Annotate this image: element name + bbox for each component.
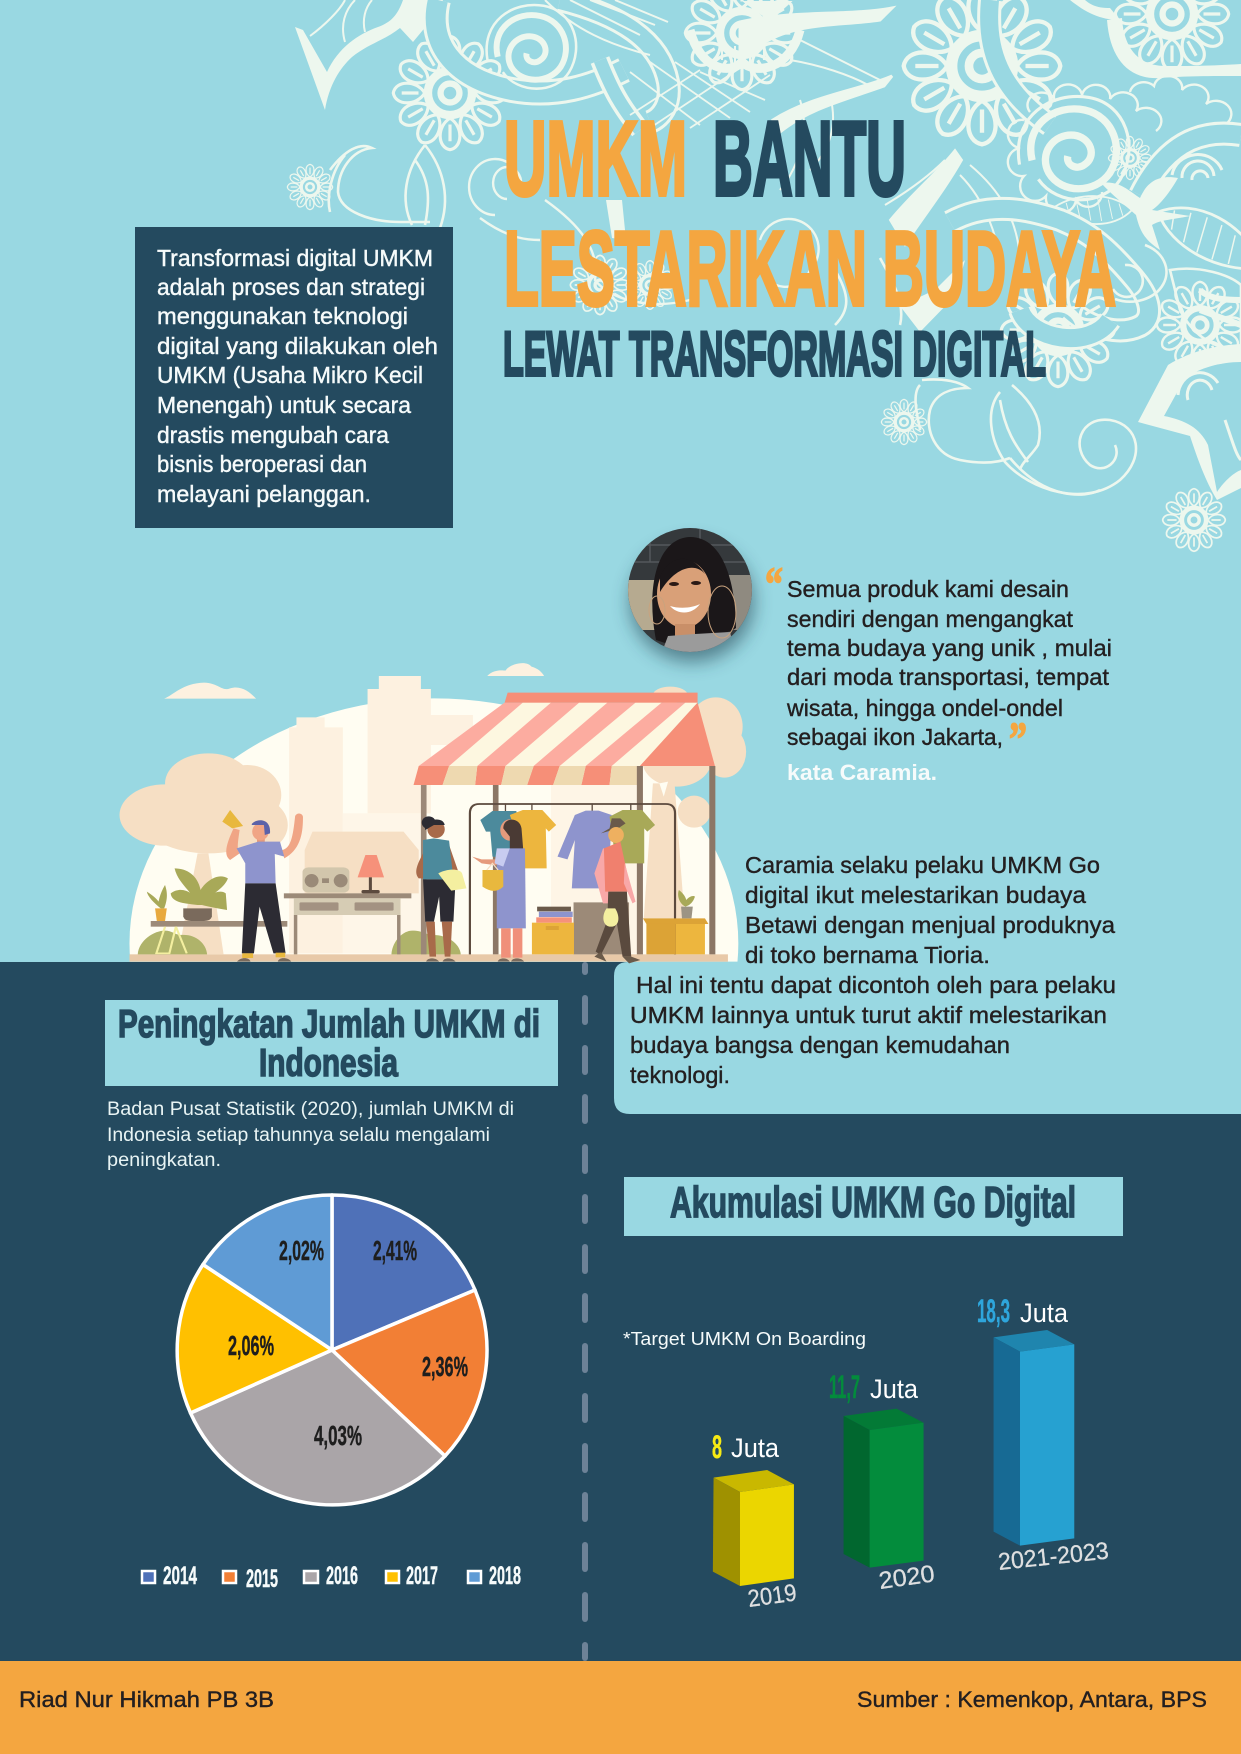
pie legend: 2017 xyxy=(406,1562,438,1590)
figure: woman with towel xyxy=(416,816,466,962)
story text: UMKM lainnya untuk turut aktif melestarikan xyxy=(630,1002,1107,1028)
pie labels xyxy=(228,1235,468,1451)
bar value labels: 8 xyxy=(712,1429,722,1465)
quote text xyxy=(765,558,1112,785)
pie legend: 2014 xyxy=(163,1562,197,1590)
pie labels: 4,03% xyxy=(314,1420,362,1451)
pie chart xyxy=(177,1195,487,1505)
bar value labels: 11,7 xyxy=(829,1369,860,1405)
story text: digital ikut melestarikan budaya xyxy=(745,882,1086,908)
figure: man with hat and shopping bag xyxy=(594,818,640,963)
icon: opening quote mark: “ xyxy=(765,558,783,611)
story text: Caramia selaku pelaku UMKM Go xyxy=(745,852,1100,878)
pie legend: 2015 xyxy=(246,1565,278,1593)
story text: di toko bernama Tioria. xyxy=(745,942,990,968)
table with radio and lamp xyxy=(284,855,411,954)
footer: Sumber : Kemenkop, Antara, BPS xyxy=(857,1687,1207,1712)
definition text: UMKM (Usaha Mikro Kecil xyxy=(157,362,423,388)
title: BANTU xyxy=(713,100,906,218)
pie labels: 2,02% xyxy=(279,1235,324,1266)
definition text: drastis mengubah cara xyxy=(157,422,389,448)
title: UMKM xyxy=(504,100,687,218)
footer: Riad Nur Hikmah PB 3B xyxy=(19,1687,274,1712)
story text: teknologi. xyxy=(630,1062,730,1088)
bar year labels xyxy=(746,1538,1110,1613)
quote text: sebagai ikon Jakarta, xyxy=(787,724,1003,750)
bar: 2019 xyxy=(713,1470,794,1586)
pie labels: 2,06% xyxy=(228,1330,274,1361)
pie legend xyxy=(142,1562,521,1593)
story text: Hal ini tentu dapat dicontoh oleh para pelaku xyxy=(636,972,1116,998)
pie legend: 2016 xyxy=(326,1562,358,1590)
story text: Betawi dengan menjual produknya xyxy=(745,912,1115,938)
bar value labels: Juta xyxy=(1020,1298,1069,1328)
heading: Akumulasi UMKM Go Digital xyxy=(624,1177,1123,1236)
batik floral pattern xyxy=(287,0,1241,551)
bar value labels: Juta xyxy=(870,1374,919,1404)
heading: Peningkatan Jumlah UMKM: Peningkatan Jumlah UMKM di xyxy=(118,1003,540,1046)
definition text: digital yang dilakukan oleh xyxy=(157,333,438,359)
bar year labels: 2019 xyxy=(746,1579,798,1613)
plants on a bench xyxy=(147,868,287,953)
quote text: ” xyxy=(1009,713,1027,766)
story text: budaya bangsa dengan kemudahan xyxy=(630,1032,1010,1058)
text: BPS statement: Indonesia setiap tahunnya selalu mengalami xyxy=(107,1125,490,1146)
bar value labels: 18,3 xyxy=(977,1293,1010,1329)
bar value labels xyxy=(712,1293,1069,1465)
text: BPS statement: peningkatan. xyxy=(107,1150,221,1171)
panel: Caramia story background xyxy=(614,962,1241,1114)
quote text: kata Caramia. xyxy=(787,760,937,785)
definition text: Menengah) untuk secara xyxy=(157,392,411,418)
quote text: sendiri dengan mengangkat xyxy=(787,606,1074,632)
text: BPS statement: Badan Pusat Statistik (2020), jumlah UMKM di xyxy=(107,1099,514,1120)
bar value labels: Juta xyxy=(731,1433,780,1463)
quote text: tema budaya yang unik , mulai xyxy=(787,635,1112,661)
pie labels: 2,36% xyxy=(422,1351,468,1382)
figure: man with megaphone xyxy=(222,810,303,962)
footer xyxy=(0,1661,1241,1754)
bar: 2021-2023 xyxy=(994,1330,1074,1546)
panel: definition box xyxy=(135,227,453,528)
pie legend: 2018 xyxy=(489,1562,521,1590)
heading: Peningkatan Jumlah UMKM: Indonesia xyxy=(259,1042,398,1085)
panel: dark lower section xyxy=(0,962,1241,1661)
bar year labels: 2020 xyxy=(877,1560,936,1595)
note: target: *Target UMKM On Boarding xyxy=(623,1328,866,1349)
title xyxy=(503,100,1116,390)
column divider xyxy=(582,962,588,1661)
icon: portrait photo xyxy=(628,528,755,662)
definition text: Transformasi digital UMKM xyxy=(157,245,433,271)
quote text: Semua produk kami desain xyxy=(787,576,1069,602)
definition text: bisnis beroperasi dan xyxy=(157,451,367,477)
definition text xyxy=(157,245,438,507)
illustration: market stall scene xyxy=(120,663,746,964)
quote text: wisata, hingga ondel-ondel xyxy=(786,695,1063,721)
quote text: dari moda transportasi, tempat xyxy=(787,664,1110,690)
bar year labels: 2021-2023 xyxy=(997,1538,1110,1576)
definition text: menggunakan teknologi xyxy=(157,303,408,329)
figure: woman with handbag xyxy=(472,819,526,962)
text: BPS statement xyxy=(107,1099,514,1171)
pie labels: 2,41% xyxy=(373,1235,417,1266)
heading: Peningkatan Jumlah UMKM xyxy=(105,1000,558,1086)
definition text: adalah proses dan strategi xyxy=(157,274,425,300)
definition text: melayani pelanggan. xyxy=(157,481,371,507)
bar: 2020 xyxy=(844,1409,924,1568)
story text xyxy=(630,852,1116,1088)
